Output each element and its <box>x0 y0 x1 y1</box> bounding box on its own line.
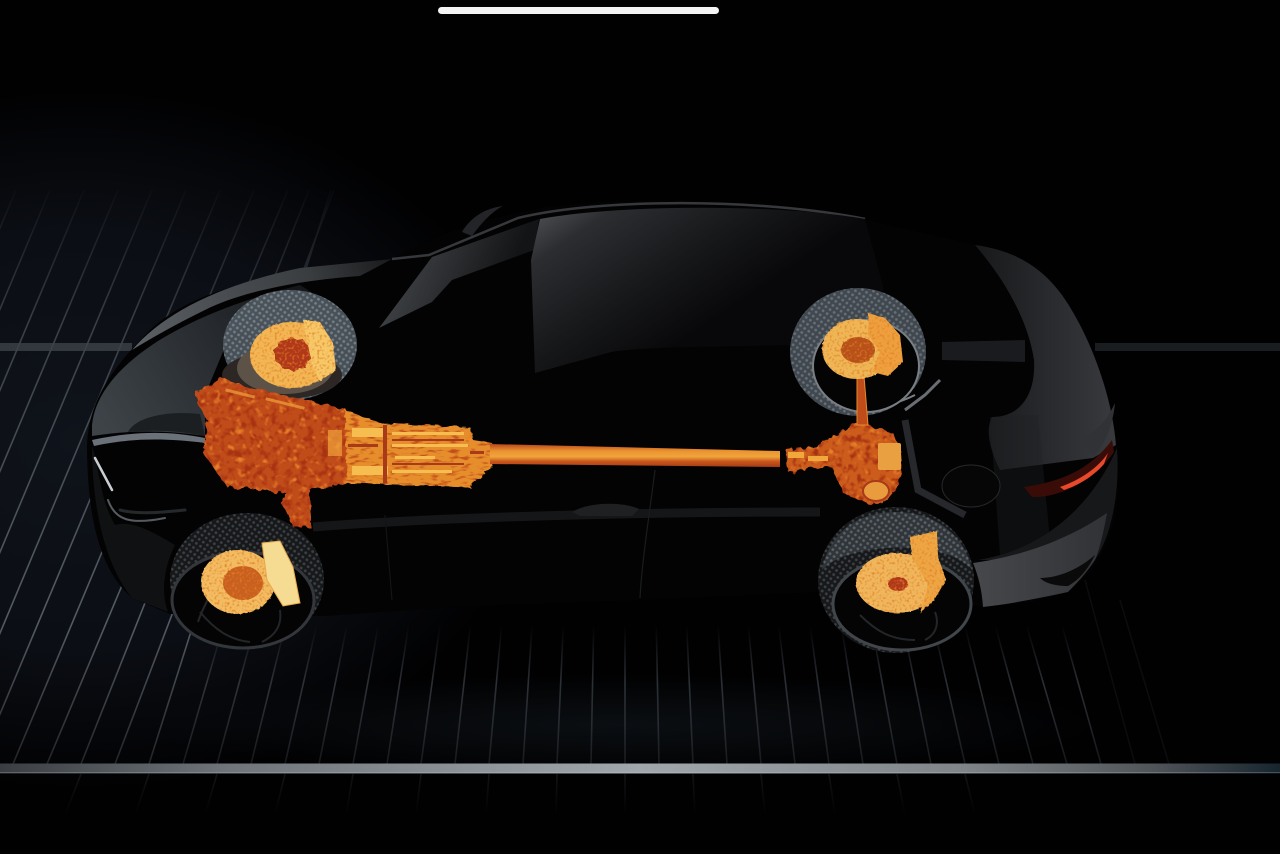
hood top edge <box>132 259 392 350</box>
rear halfshaft <box>857 376 868 425</box>
rear trunk texture <box>942 340 1025 362</box>
suspension arms <box>828 380 965 515</box>
spokes <box>860 612 937 640</box>
engine highlights <box>225 388 342 456</box>
differential cover <box>878 443 901 470</box>
floor lines <box>0 190 1169 815</box>
windshield <box>379 219 539 328</box>
front fascia strip <box>92 433 205 446</box>
hood and front wing <box>92 285 350 436</box>
front bottom caliper <box>262 541 300 606</box>
transmission shadows <box>348 425 484 483</box>
rear bottom wheel <box>818 507 974 653</box>
engine bay shadow <box>128 413 205 436</box>
flange <box>863 481 889 501</box>
front lower fascia <box>92 446 175 612</box>
rear differential <box>786 420 902 505</box>
headlight <box>95 458 185 521</box>
rear side panel <box>978 448 1118 560</box>
front bottom wheel <box>170 513 324 648</box>
bumper notch <box>1040 555 1095 586</box>
car <box>87 200 1118 653</box>
front bottom brake disc <box>201 550 275 614</box>
rear inner panel <box>990 415 1050 555</box>
fuel cap <box>942 465 1000 507</box>
rear top brake disc <box>822 319 892 379</box>
engine and gearbox <box>197 377 492 527</box>
propeller shaft <box>490 444 780 467</box>
front top caliper <box>303 320 336 381</box>
rear quarter band <box>975 245 1116 470</box>
spokes <box>198 595 280 642</box>
transmission highlights <box>352 428 468 475</box>
car body silhouette <box>87 200 1118 616</box>
transmission <box>345 410 492 487</box>
rear top caliper <box>868 313 903 376</box>
roof edge <box>392 203 865 259</box>
door details <box>313 470 820 600</box>
floor bar <box>0 764 1280 774</box>
rear bottom brake disc <box>856 553 938 613</box>
spoiler <box>1080 403 1115 456</box>
top white bar <box>438 7 719 14</box>
taillight <box>1024 440 1114 497</box>
rear top wheel <box>790 288 926 416</box>
roof glass <box>531 208 884 373</box>
rear bumper <box>973 513 1107 607</box>
front top wheel <box>222 290 357 400</box>
front top brake disc <box>250 322 334 388</box>
coupling <box>788 452 828 461</box>
mirror <box>462 206 503 236</box>
rear bottom caliper <box>910 531 946 613</box>
horizon lines <box>0 343 1280 351</box>
